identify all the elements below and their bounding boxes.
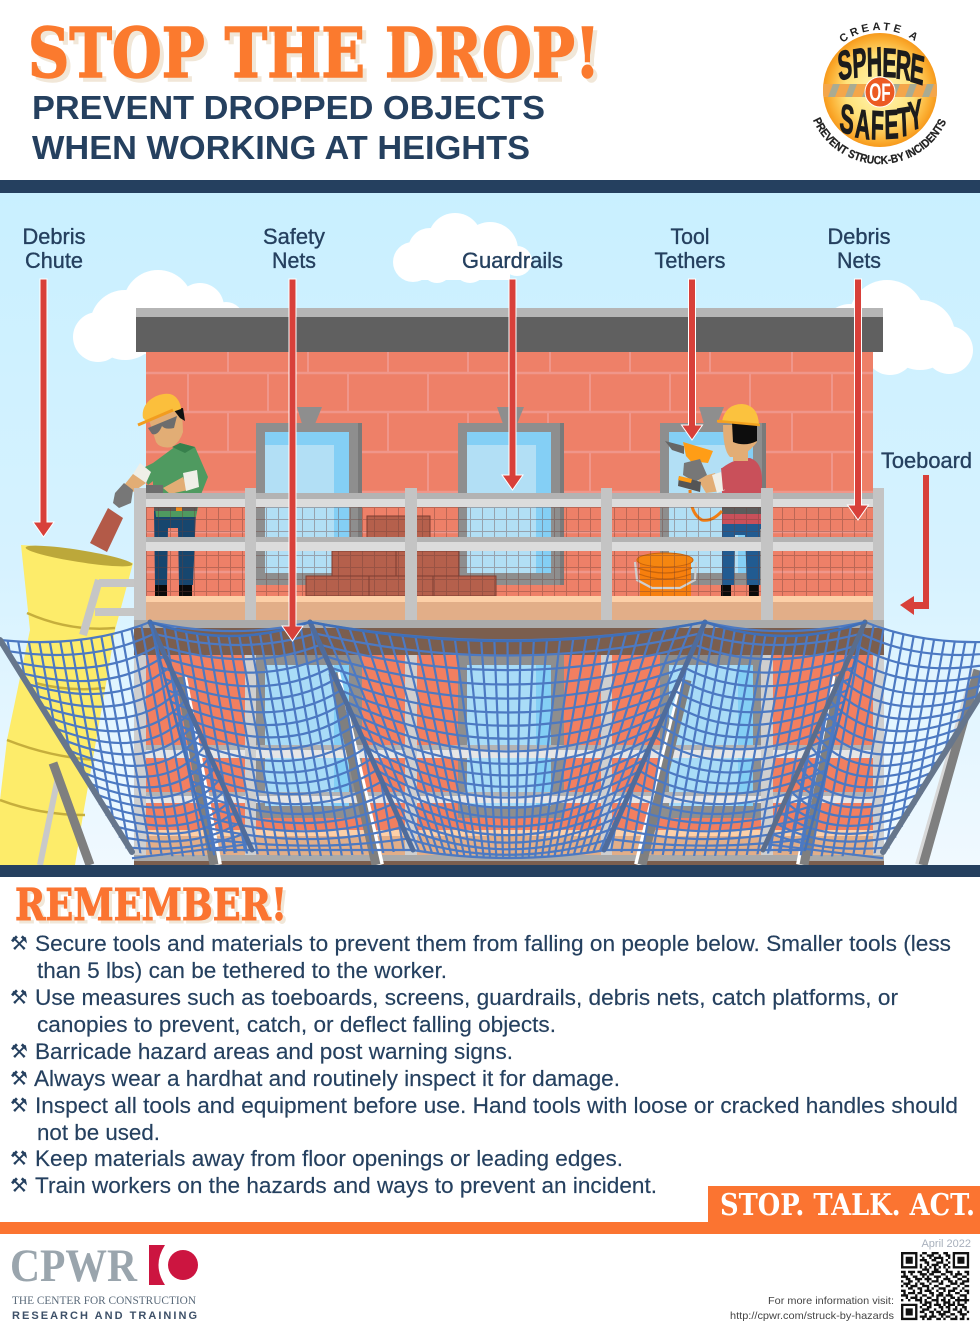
net panel: far left [0, 615, 279, 865]
logo: CPWR: THE CENTER FOR CONSTRUCTION [12, 1295, 197, 1307]
window: right [660, 407, 766, 585]
tip: train workers: Train workers on the hazards and ways to prevent an incident. [35, 1173, 657, 1198]
badge: create a sphere of safety: OF [869, 79, 891, 107]
tip: secure tools: than 5 lbs) can be tethered to the worker. [37, 958, 447, 983]
toeboard [146, 596, 873, 620]
tip: use measures: canopies to prevent, catch, or deflect falling objects. [37, 1012, 556, 1037]
heading: remember: REMEMBER! [15, 880, 287, 931]
label: debris chute: Debris [22, 224, 86, 249]
tip: keep materials: ⚒ [10, 1146, 28, 1170]
label: guardrails: Guardrails [462, 248, 563, 273]
more information text [730, 1295, 894, 1322]
title: STOP THE DROP! [28, 14, 600, 94]
label: safety nets: Nets [272, 248, 316, 273]
floor slab [134, 620, 884, 655]
tip: secure tools: Secure tools and materials to prevent them from falling on people below. Smaller tools (less [35, 931, 951, 956]
net panel: far right [736, 615, 980, 865]
badge: create a sphere of safety: SAFETY [838, 90, 925, 149]
cloud: centre [393, 213, 532, 283]
tip: use measures [10, 985, 898, 1037]
tip: use measures: Use measures such as toeboards, screens, guardrails, debris nets, catch platforms, or [35, 985, 898, 1010]
tips list [10, 931, 958, 1198]
logo: CPWR: RESEARCH AND TRAINING [12, 1310, 197, 1322]
tip: secure tools [10, 931, 951, 983]
label: debris nets: Nets [837, 248, 881, 273]
subtitle [32, 89, 545, 166]
tip: inspect: ⚒ [10, 1093, 28, 1117]
top navy bar [0, 180, 980, 193]
safety nets [0, 615, 980, 865]
subtitle: PREVENT DROPPED OBJECTS [32, 89, 545, 126]
orange bucket [635, 553, 696, 596]
header background [0, 0, 980, 180]
more information text: http://cpwr.com/struck-by-hazards [730, 1310, 894, 1322]
net ropes [0, 622, 980, 852]
tip: barricade: Barricade hazard areas and post warning signs. [35, 1039, 513, 1064]
roof [136, 308, 883, 352]
qr code [901, 1253, 969, 1319]
tip: hardhat: Always wear a hardhat and routinely inspect it for damage. [34, 1066, 620, 1091]
tip: inspect: Inspect all tools and equipment before use. Hand tools with loose or cracked handles should [35, 1093, 958, 1118]
stacked bricks [306, 516, 496, 596]
label: tool tethers: Tool [670, 224, 710, 249]
tip: keep materials: Keep materials away from floor openings or leading edges. [35, 1146, 623, 1171]
worker: right, with tethered drill [665, 404, 762, 596]
label: tool tethers [654, 224, 726, 273]
badge: create a sphere of safety [813, 22, 946, 164]
arrow: guardrails [502, 279, 523, 490]
logo: CPWR [10, 1240, 198, 1322]
label: debris chute [22, 224, 86, 273]
guardrails [134, 488, 884, 620]
sky background [0, 193, 980, 865]
badge: create a sphere of safety: PREVENT STRUCK-BY INCIDENTS [813, 117, 946, 164]
subtitle: WHEN WORKING AT HEIGHTS [32, 129, 530, 166]
debris mesh screen [146, 507, 873, 596]
title: STOP THE DROP! [32, 18, 604, 98]
tip: hardhat: ⚒ [10, 1066, 28, 1090]
falling brick [90, 508, 123, 552]
label: toeboard: Toeboard [881, 448, 972, 473]
badge: create a sphere of safety: CREATE A [840, 22, 916, 42]
orange footer bar [0, 1222, 980, 1234]
net panel: left [120, 615, 448, 865]
label: debris nets [828, 224, 890, 273]
tip: barricade: ⚒ [10, 1039, 28, 1063]
cloud: left [73, 270, 244, 362]
net panel: right [566, 615, 895, 865]
window: centre [458, 407, 564, 585]
cloud: right [822, 280, 973, 375]
label: debris chute: Chute [25, 248, 83, 273]
tip: use measures: ⚒ [10, 985, 28, 1009]
tip: train workers: ⚒ [10, 1173, 28, 1197]
label: safety nets [263, 224, 325, 273]
label: tool tethers: Tethers [654, 248, 726, 273]
building upper wall [146, 352, 873, 622]
logo: CPWR: CPWR [10, 1240, 138, 1292]
worker: left, dropping a brick [113, 394, 208, 596]
arrow: debris nets [848, 279, 868, 520]
net support poles [40, 670, 978, 865]
tip: secure tools: ⚒ [10, 931, 28, 955]
arrow: debris chute [33, 279, 54, 537]
tip: inspect [10, 1093, 958, 1145]
label: debris nets: Debris [828, 224, 890, 249]
badge: create a sphere of safety: SPHERE [836, 38, 926, 94]
bottom navy bar [0, 865, 980, 877]
arrow: safety nets [282, 279, 303, 641]
arrow: tool tethers [682, 279, 702, 440]
debris chute [0, 542, 140, 865]
labels and arrows [22, 224, 972, 641]
more information text: For more information visit: [768, 1295, 894, 1307]
tip: inspect: not be used. [37, 1120, 160, 1145]
window: left [256, 407, 362, 585]
heading: remember: REMEMBER! [18, 883, 290, 934]
date: April 2022 [921, 1238, 971, 1250]
lower floor of building [134, 655, 884, 865]
net panel: centre [310, 622, 705, 858]
arrow: toeboard [900, 475, 929, 615]
label: safety nets: Safety [263, 224, 325, 249]
